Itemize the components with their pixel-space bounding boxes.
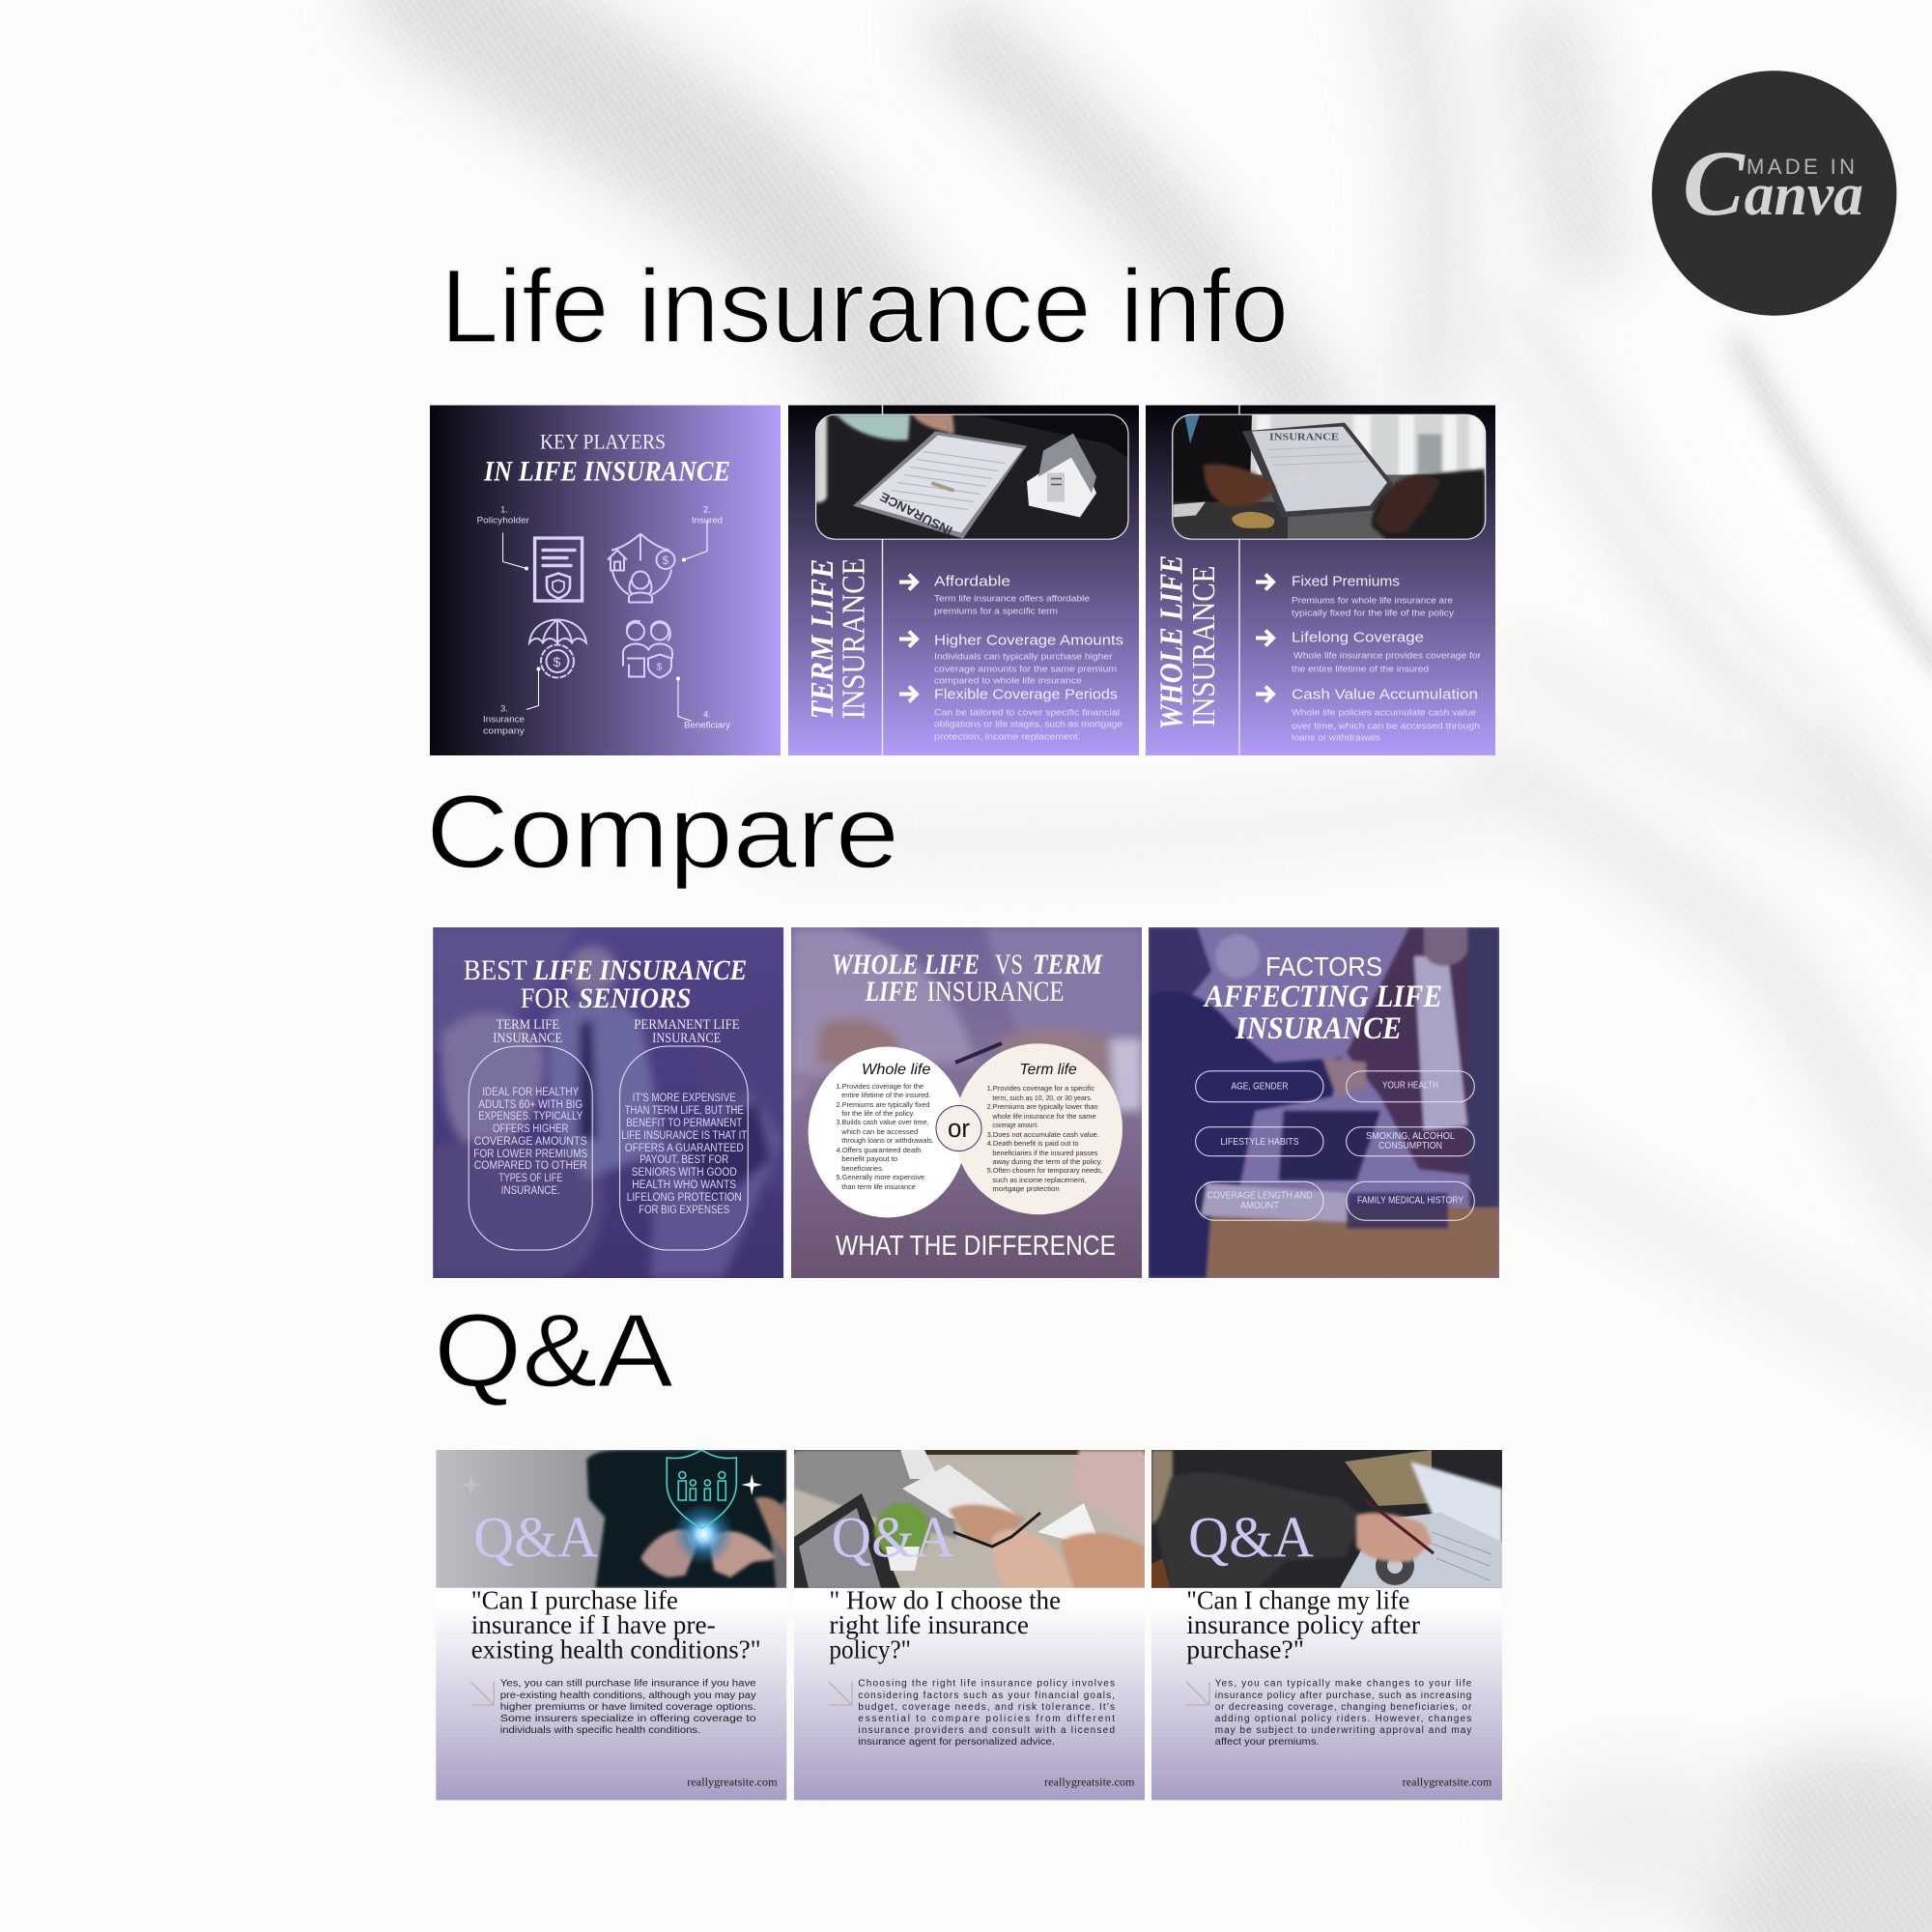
- panel: question 1 pre-existing conditions: [436, 1450, 786, 1801]
- circle: term life: coverage amount.: [992, 1121, 1038, 1129]
- website: reallygreatsite.com: [1403, 1776, 1492, 1788]
- photo: insurance contract and house: [815, 413, 1136, 541]
- answer text: or decreasing coverage, changing beneficiaries, or: [1215, 1702, 1472, 1713]
- panel: question 2 choosing a policy: [794, 1450, 1145, 1801]
- answer text: may be subject to underwriting approval and may: [1215, 1725, 1471, 1736]
- question text: existing health conditions?": [471, 1635, 761, 1664]
- list: whole life benefits: over time, which can be accessed through: [1292, 721, 1480, 732]
- caption: what the difference: WHAT THE DIFFERENCE: [836, 1231, 1116, 1262]
- circle: term life: such as income replacement,: [992, 1176, 1086, 1184]
- arrows: [899, 574, 917, 701]
- photo: insurance contract and house: INSURANCE: [877, 489, 954, 538]
- circle: whole life: 5.Generally more expensive: [837, 1173, 924, 1181]
- circle: term life: away during the term of the policy.: [992, 1157, 1102, 1166]
- card: permanent life: LIFELONG PROTECTION: [627, 1192, 742, 1204]
- title: [464, 960, 746, 1009]
- photo: seniors meeting adviser: [433, 927, 783, 1278]
- title: FOR: [521, 982, 570, 1014]
- list: term life benefits: [934, 574, 1123, 742]
- photo: advisers reviewing papers: [794, 1450, 1145, 1588]
- answer text: adding optional policy riders. However, changes: [1215, 1714, 1471, 1724]
- list: term life benefits: Flexible Coverage Periods: [934, 686, 1118, 703]
- card: permanent life: BENEFIT TO PERMANENT: [626, 1118, 742, 1129]
- circle: whole life: through loans or withdrawals.: [841, 1136, 934, 1145]
- panel: key players in life insurance: IN LIFE INSURANCE: [483, 456, 730, 487]
- card: permanent life: [620, 1046, 748, 1250]
- panel: key players in life insurance: [430, 406, 781, 755]
- label: 3 insurance company: 3.: [500, 703, 508, 715]
- icon: umbrella with coin: [529, 620, 586, 678]
- circle: whole life: 3.Builds cash value over time,: [837, 1118, 929, 1126]
- answer text: [1215, 1679, 1472, 1747]
- answer text: Yes, you can typically make changes to your life: [1215, 1679, 1472, 1690]
- list: whole life benefits: loans or withdrawals: [1292, 732, 1380, 744]
- title: INSURANCE: [927, 976, 1065, 1008]
- list: whole life benefits: [1292, 574, 1481, 744]
- factor labels: YOUR HEALTH: [1382, 1081, 1438, 1092]
- circle: whole life: 1.Provides coverage for the: [837, 1082, 923, 1091]
- answer text: insurance agent for personalized advice.: [858, 1737, 1055, 1747]
- circle: whole life: benefit payout to: [841, 1154, 897, 1163]
- card: permanent life: IT'S MORE EXPENSIVE: [633, 1093, 736, 1104]
- label: 4 beneficiary: 4.: [703, 709, 711, 721]
- column headings: INSURANCE: [652, 1031, 721, 1046]
- circle: whole life: which can be accessed: [840, 1127, 918, 1136]
- circle: term life: Term life: [1020, 1062, 1077, 1078]
- vertical title: whole life insurance: [1154, 554, 1222, 730]
- circle: term life: 1.Provides coverage for a specific: [987, 1084, 1094, 1093]
- vertical title: term life insurance: TERM LIFE: [805, 558, 840, 719]
- vertical title: term life insurance: [805, 558, 871, 719]
- factor labels: SMOKING, ALCOHOL: [1366, 1131, 1455, 1142]
- title: Life insurance info: Life insurance info: [440, 247, 1289, 364]
- factor labels: [1208, 1081, 1463, 1211]
- list: term life benefits: protection, income replacement: [934, 732, 1078, 742]
- question text: "Can I purchase life: [471, 1586, 678, 1615]
- label: Q&A: Q&A: [1188, 1506, 1314, 1570]
- photo: handshake over table: [791, 927, 1142, 1278]
- question text: [1186, 1586, 1420, 1664]
- label: 3 insurance company: Insurance: [483, 715, 525, 724]
- card: term life: IDEAL FOR HEALTHY: [482, 1087, 579, 1098]
- circle: term life: mortgage protection: [992, 1184, 1060, 1193]
- card: permanent life: LIFE INSURANCE IS THAT IT: [621, 1130, 747, 1142]
- question text: right life insurance: [829, 1610, 1029, 1639]
- list: whole life benefits: Lifelong Coverage: [1292, 630, 1424, 645]
- answer text: individuals with specific health conditions.: [500, 1725, 700, 1736]
- card: term life: COVERAGE AMOUNTS: [474, 1136, 587, 1148]
- answer text: essential to compare policies from different: [858, 1714, 1115, 1724]
- factor labels: CONSUMPTION: [1378, 1141, 1442, 1151]
- card: permanent life: HEALTH WHO WANTS: [632, 1179, 736, 1191]
- arrows: [1256, 574, 1273, 701]
- answer text: insurance providers and consult with a licensed: [858, 1725, 1115, 1736]
- answer text: insurance policy after purchase, such as increasing: [1215, 1690, 1471, 1701]
- question text: [829, 1586, 1061, 1664]
- card: term life: TYPES OF LIFE: [498, 1173, 562, 1184]
- photo: signing insurance clipboard: [1172, 413, 1493, 543]
- list: whole life benefits: Whole life policies accumulate cash value: [1292, 707, 1476, 719]
- card: term life: ADULTS 60+ WITH BIG: [478, 1099, 582, 1111]
- title: [1203, 952, 1442, 1046]
- list: whole life benefits: Premiums for whole life insurance are: [1292, 595, 1453, 607]
- icon: arrow: [1186, 1682, 1209, 1705]
- icon: policy document: [535, 538, 582, 601]
- circle: term life: [954, 1043, 1122, 1214]
- question text: "Can I change my life: [1186, 1586, 1409, 1615]
- connector lines: [503, 520, 707, 721]
- title: VS: [995, 949, 1023, 980]
- label: 4 beneficiary: Beneficiary: [684, 721, 730, 730]
- panel: factors affecting life insurance: [1149, 927, 1499, 1278]
- panel: best life insurance for seniors: [433, 927, 783, 1278]
- title: SENIORS: [579, 982, 691, 1014]
- circle: term life: 4.Death benefit is paid out to: [987, 1139, 1079, 1148]
- badge: made in canva: Canva: [1683, 131, 1863, 235]
- question text: insurance if I have pre-: [471, 1610, 716, 1639]
- panel: whole life vs term life: [791, 927, 1142, 1278]
- title: LIFE: [865, 976, 919, 1008]
- panel: whole life insurance: [1146, 406, 1495, 755]
- label: 2 insured: Insured: [692, 516, 723, 526]
- panel: key players in life insurance: KEY PLAYERS: [540, 429, 666, 454]
- icon: insured person with shield: $: [663, 554, 668, 567]
- label: 3 insurance company: company: [483, 726, 525, 736]
- list: term life benefits: Can be tailored to cover specific financial: [934, 707, 1120, 719]
- title: [833, 954, 1103, 1001]
- answer text: higher premiums or have limited coverage options.: [500, 1702, 756, 1713]
- title: FACTORS: [1265, 952, 1382, 981]
- list: term life benefits: compared to whole life insurance: [934, 676, 1082, 686]
- label: 3 insurance company: [483, 703, 525, 736]
- card: permanent life: SENIORS WITH GOOD: [632, 1167, 737, 1179]
- list: term life benefits: coverage amounts for the same premium: [934, 665, 1117, 674]
- answer text: Choosing the right life insurance policy involves: [858, 1679, 1115, 1690]
- question text: " How do I choose the: [829, 1586, 1061, 1615]
- badge: made in canva: MADE IN: [1747, 155, 1855, 179]
- circle: whole life: entire lifetime of the insured.: [841, 1091, 930, 1099]
- answer text: budget, coverage needs, and risk tolerance. It's: [858, 1702, 1115, 1713]
- circle: term life: 5.Often chosen for temporary needs,: [987, 1166, 1103, 1175]
- icon: umbrella with coin: $: [553, 654, 560, 669]
- list: whole life benefits: Whole life insurance provides coverage for: [1293, 651, 1481, 661]
- vertical title: term life insurance: INSURANCE: [837, 558, 871, 719]
- circle: whole life: 4.Offers guaranteed death: [837, 1146, 922, 1154]
- panel: term life insurance: [788, 406, 1139, 755]
- title: LIFE INSURANCE: [532, 954, 747, 986]
- circle: term life: term, such as 10, 20, or 30 years.: [992, 1094, 1093, 1102]
- icon: beneficiaries: $: [657, 661, 663, 672]
- question text: insurance policy after: [1186, 1610, 1420, 1639]
- title: WHOLE LIFE: [832, 949, 980, 980]
- circle: whole life: for the life of the policy.: [841, 1109, 915, 1118]
- list: term life benefits: premiums for a specific term: [934, 607, 1058, 616]
- card: term life: [469, 1046, 592, 1250]
- photo: hands holding glowing family shield: [436, 1450, 786, 1588]
- list: whole life benefits: Fixed Premiums: [1292, 574, 1400, 589]
- card: permanent life: PAYOUT. BEST FOR: [639, 1154, 728, 1166]
- photo: signing a document: [1151, 1450, 1502, 1588]
- vertical title: whole life insurance: WHOLE LIFE: [1154, 554, 1190, 730]
- answer text: considering factors such as your financial goals,: [858, 1690, 1115, 1701]
- icon: beneficiaries: [623, 621, 672, 678]
- label: 2 insured: [692, 504, 723, 526]
- list: term life benefits: Individuals can typically purchase higher: [934, 651, 1113, 663]
- list: whole life benefits: the entire lifetime of the insured: [1292, 665, 1429, 674]
- title: INSURANCE: [1235, 1011, 1402, 1046]
- heading: Compare: Compare: [426, 773, 899, 890]
- label: 4 beneficiary: [684, 709, 730, 730]
- label: Q&A: Q&A: [473, 1506, 598, 1570]
- factor labels: LIFESTYLE HABITS: [1221, 1137, 1299, 1148]
- column headings: [493, 1020, 739, 1042]
- title: BEST: [464, 954, 527, 986]
- photo: business handshake: [1149, 927, 1499, 1278]
- answer text: Some insurers specialize in offering coverage to: [500, 1714, 756, 1724]
- question text: [471, 1586, 761, 1664]
- circle: whole life: 2.Premiums are typically fixed: [837, 1100, 929, 1109]
- badge: made in canva: [1652, 71, 1896, 316]
- card: term life: FOR LOWER PREMIUMS: [473, 1149, 587, 1160]
- photo: signing insurance clipboard: INSURANCE: [1269, 431, 1339, 442]
- column headings: INSURANCE: [493, 1031, 562, 1046]
- icon: arrow: [470, 1682, 494, 1705]
- circle: term life: 2.Premiums are typically lower than: [987, 1102, 1098, 1111]
- factor labels: FAMILY MEDICAL HISTORY: [1357, 1196, 1463, 1207]
- label: 1 policyholder: [477, 504, 529, 526]
- circle: whole life: [809, 1047, 967, 1217]
- icon: insured person with shield: [608, 533, 674, 603]
- label: 1 policyholder: 1.: [500, 504, 508, 516]
- column headings: TERM LIFE: [497, 1017, 559, 1033]
- list: term life benefits: Term life insurance offers affordable: [934, 593, 1090, 605]
- card: term life: OFFERS HIGHER: [493, 1123, 568, 1135]
- title: TERM: [1033, 949, 1103, 980]
- circle: term life: beneficiaries if the insured passes: [992, 1149, 1098, 1157]
- heading: Q&A: Q&A: [434, 1292, 673, 1408]
- answer text: [500, 1679, 756, 1736]
- answer text: affect your premiums.: [1215, 1737, 1320, 1747]
- answer text: Yes, you can still purchase life insurance if you have: [500, 1679, 756, 1690]
- list: term life benefits: obligations or life stages, such as mortgage: [934, 719, 1122, 730]
- website: reallygreatsite.com: [687, 1776, 778, 1788]
- list: whole life benefits: Cash Value Accumulation: [1292, 686, 1478, 703]
- panel: question 3 changing a policy: [1151, 1450, 1502, 1801]
- question text: policy?": [829, 1635, 911, 1664]
- card: term life: COMPARED TO OTHER: [474, 1160, 587, 1172]
- website: reallygreatsite.com: [1044, 1776, 1135, 1788]
- factor pills: [1196, 1071, 1474, 1220]
- card: permanent life: OFFERS A GUARANTEED: [625, 1143, 744, 1154]
- answer text: [858, 1679, 1115, 1747]
- circle: or: or: [948, 1114, 970, 1143]
- circle: or: [936, 1105, 981, 1151]
- label: 1 policyholder: Policyholder: [477, 516, 529, 526]
- card: term life: EXPENSES. TYPICALLY: [478, 1111, 582, 1122]
- circle: term life: whole life insurance for the same: [991, 1112, 1095, 1121]
- card: permanent life: FOR BIG EXPENSES: [639, 1205, 729, 1216]
- icon: arrow: [829, 1682, 852, 1705]
- title: AFFECTING LIFE: [1203, 980, 1442, 1014]
- question text: purchase?": [1186, 1635, 1304, 1664]
- answer text: pre-existing health conditions, although you may pay: [500, 1690, 756, 1701]
- list: term life benefits: Affordable: [934, 574, 1010, 589]
- circle: term life: 3.Does not accumulate cash value.: [987, 1130, 1099, 1139]
- card: permanent life: THAN TERM LIFE, BUT THE: [625, 1105, 744, 1117]
- factor labels: AMOUNT: [1240, 1201, 1279, 1211]
- label: Q&A: Q&A: [832, 1506, 954, 1570]
- circle: whole life: Whole life: [862, 1062, 931, 1078]
- factor labels: COVERAGE LENGTH AND: [1208, 1191, 1312, 1202]
- circle: whole life: than term life insurance: [841, 1182, 916, 1191]
- list: whole life benefits: typically fixed for the life of the policy: [1292, 609, 1454, 618]
- factor labels: AGE, GENDER: [1231, 1081, 1289, 1092]
- list: term life benefits: Higher Coverage Amounts: [934, 632, 1123, 649]
- label: 2 insured: 2.: [703, 504, 711, 516]
- circle: whole life: beneficiaries.: [841, 1164, 884, 1173]
- column headings: PERMANENT LIFE: [634, 1017, 740, 1033]
- vertical title: whole life insurance: INSURANCE: [1186, 566, 1222, 726]
- card: term life: INSURANCE.: [501, 1185, 560, 1197]
